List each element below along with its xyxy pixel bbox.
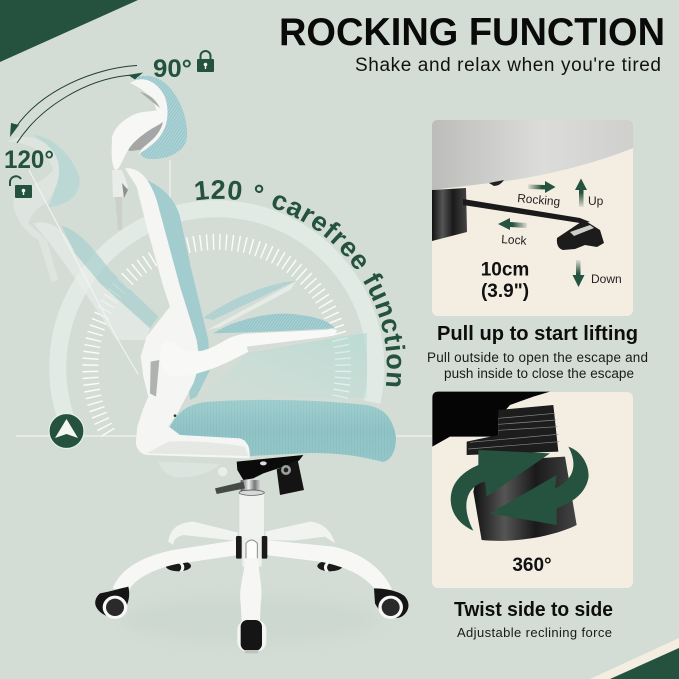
- panel: rocking lever: [432, 120, 633, 316]
- ghost armrest: [203, 281, 296, 330]
- under-seat ghost: [158, 462, 220, 477]
- front leg: [240, 558, 261, 622]
- arrow: down: [572, 260, 584, 287]
- baseline rule: [16, 435, 432, 437]
- floor shadow: [120, 596, 380, 644]
- front side legs: [113, 540, 392, 592]
- base and casters: [95, 455, 408, 653]
- headrest frame and bracket: [112, 79, 168, 230]
- label: 90 degrees: 90°: [153, 55, 192, 83]
- description: pull up: [427, 350, 648, 381]
- armrest: [160, 314, 337, 377]
- label: down: Down: [591, 272, 622, 286]
- description: pull up: Pull outside to open the escape and: [427, 350, 648, 365]
- ghost recline guide lines: [29, 160, 170, 374]
- back mesh: [147, 180, 210, 400]
- title: ROCKING FUNCTION: [279, 11, 665, 54]
- measurement inches: (3.9"): [481, 281, 529, 302]
- decorative corner: top left green triangle: [0, 0, 138, 62]
- icon: closed lock: [197, 51, 214, 72]
- ghost chair: reclined 120 degree position: [7, 135, 158, 340]
- label: up: Up: [588, 194, 604, 208]
- black cylinder: [432, 188, 467, 241]
- label: lock: Lock: [501, 232, 528, 248]
- seat mechanism: [215, 455, 304, 495]
- label: 360 degrees: 360°: [512, 555, 552, 576]
- threaded column: [467, 405, 559, 455]
- lower cylinder: [473, 457, 577, 541]
- headrest mesh: [137, 76, 187, 159]
- hub: [236, 536, 267, 567]
- lever foot: [557, 220, 604, 250]
- rear legs: [168, 522, 335, 545]
- ghost seat: reclined back on right: [200, 333, 367, 400]
- arrow: rocking: [528, 181, 556, 193]
- panel: twist column: [432, 392, 633, 588]
- dial marker: up arrow button: [49, 414, 84, 448]
- heading: pull up: Pull up to start lifting: [437, 323, 638, 345]
- rear casters: [166, 561, 343, 571]
- icon: open lock: [10, 176, 32, 198]
- decorative corner: bottom right stripe: [590, 638, 679, 679]
- knob under seat: [489, 180, 504, 186]
- seat cushion: [170, 400, 396, 462]
- caster right: [374, 588, 408, 619]
- measurement: 10cm: [481, 260, 529, 280]
- arrow: up: [575, 178, 587, 207]
- side frame: [125, 168, 250, 458]
- rotation arrows: [451, 447, 589, 531]
- centre column: [239, 493, 264, 540]
- caster front: [237, 620, 266, 653]
- caster left: [95, 587, 129, 619]
- lever arm: [463, 199, 590, 223]
- label: 120 degrees: 120°: [4, 146, 54, 174]
- rotation arrows between headrest positions: [10, 66, 143, 143]
- subtitle: Shake and relax when you're tired: [355, 55, 661, 76]
- arrow: lock: [498, 218, 527, 230]
- heading: twist: Twist side to side: [454, 599, 613, 621]
- chair: [95, 76, 408, 653]
- seat underside: [432, 120, 633, 190]
- description: twist: Adjustable reclining force: [457, 625, 612, 640]
- description: pull up: push inside to close the escape: [444, 366, 634, 381]
- recline dial: ring and ticks: [58, 209, 376, 433]
- seat mesh overlay: [170, 400, 396, 462]
- curved caption: 120 degree carefree function: 120 ° carefree function: [195, 180, 406, 386]
- label: rocking: Rocking: [517, 191, 561, 209]
- black seat plate: [432, 392, 550, 447]
